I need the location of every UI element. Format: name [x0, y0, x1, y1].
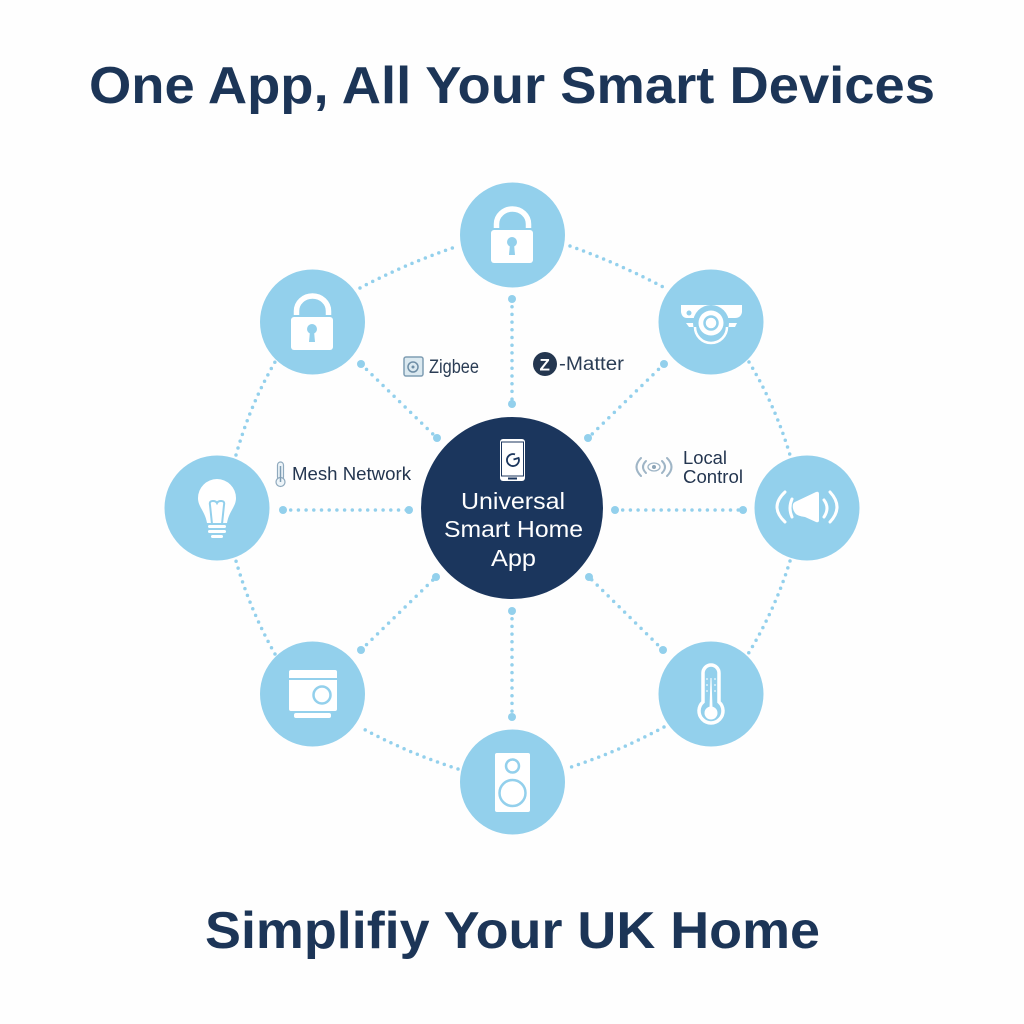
dotted spokes to the hub: [283, 299, 743, 717]
footer tagline: Simplifiy Your UK Home: [205, 902, 820, 960]
hub label: App: [491, 545, 536, 571]
title: One App, All Your Smart Devices: [89, 57, 935, 115]
label: Mesh Network: Mesh Network: [292, 464, 412, 484]
label: Mesh Network: [276, 462, 412, 486]
outer dotted ring: [236, 246, 790, 769]
device node: audio speaker: [460, 730, 565, 834]
spoke end dots: [279, 295, 747, 721]
device node: thermometer: [658, 642, 764, 746]
hub label: Smart Home: [444, 516, 583, 542]
hub label: [444, 488, 583, 571]
label: Zigbee: Zigbee: [429, 357, 479, 378]
central hub: [421, 417, 603, 599]
label: Matter: Z: [540, 356, 550, 374]
hub label: Universal: [461, 488, 565, 514]
device node: upper-left lock: [260, 270, 365, 374]
label: Matter: -Matter: [559, 354, 625, 375]
label: Local Control: Control: [683, 467, 743, 487]
icon: smartphone: [500, 439, 525, 481]
label: Local Control: [636, 448, 743, 487]
device node: light bulb: [164, 456, 270, 560]
device node: top lock: [460, 182, 565, 288]
device node: washing machine: [260, 642, 365, 746]
label: Matter: [533, 352, 625, 376]
label: Zigbee: [404, 357, 479, 378]
label: Local Control: Local: [683, 448, 727, 468]
device node: loudspeaker: [754, 456, 860, 560]
device node: security camera: [658, 270, 764, 374]
